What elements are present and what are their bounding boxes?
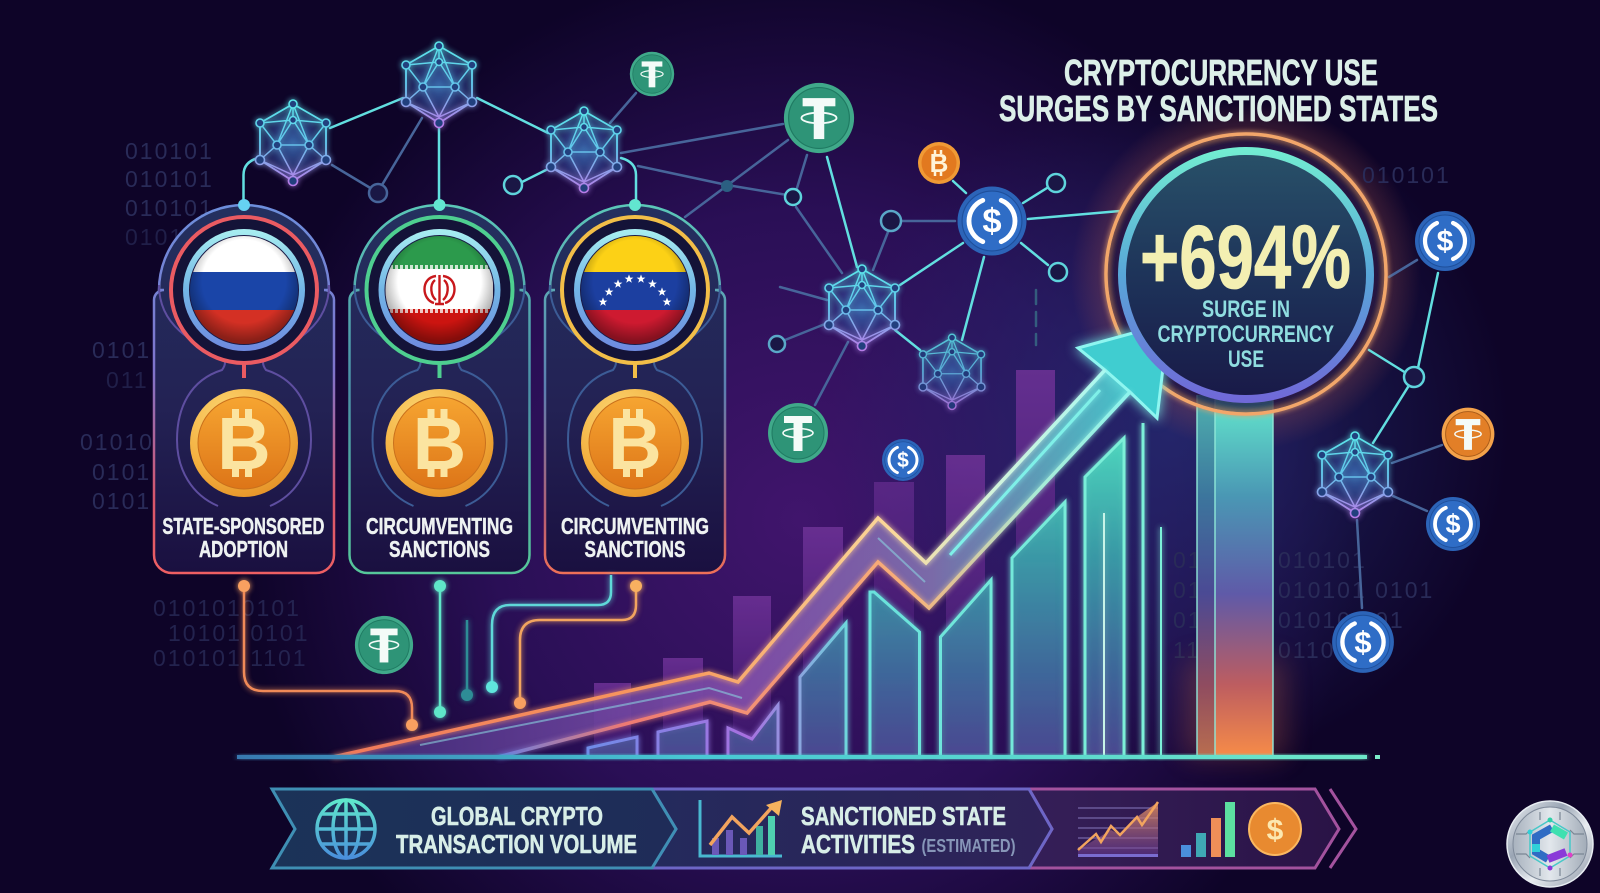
title (999, 52, 1438, 129)
legend text: global crypto transaction volume: TRANSACTION VOLUME (396, 829, 637, 859)
bitcoin coin (581, 389, 689, 497)
icon: tether token centre (768, 403, 828, 463)
icon: dollar coin (1249, 803, 1301, 855)
stat callout: +694% (1122, 151, 1370, 399)
stat outer orange ring (1106, 134, 1386, 414)
icon: dollar coin: $ (1267, 814, 1284, 847)
icon: tether token orange right (1442, 408, 1494, 460)
binary background text: 0101 (125, 224, 184, 250)
label: circumventing sanctions Iran: CIRCUMVENTING (366, 513, 513, 539)
icon: tether token large top (784, 83, 854, 153)
binary background text: 0101 (92, 459, 151, 485)
icon: blockchain node Iran branch (402, 42, 476, 128)
stat description: SURGE IN (1202, 296, 1290, 323)
label: state-sponsored adoption: ADOPTION (199, 536, 288, 562)
rising bars chart (588, 423, 1161, 757)
binary background text (80, 138, 1451, 671)
icon: line and bar chart (700, 800, 782, 856)
small network nodes (369, 174, 1424, 387)
label: circumventing sanctions Venezuela: CIRCUMVENTING (561, 513, 709, 539)
icon: blockchain node Venezuela branch (546, 107, 622, 192)
title: CRYPTOCURRENCY USE (1064, 52, 1378, 93)
icon: usdc token right: $ (1445, 509, 1461, 539)
binary background text: 10101 0101 (168, 620, 310, 646)
binary background text: 010101 (1278, 547, 1367, 573)
binary background text: 010101 0101 (1278, 577, 1434, 603)
stat description: USE (1228, 346, 1264, 373)
chart baseline (237, 755, 1380, 759)
label: state-sponsored adoption (162, 513, 324, 562)
Russia flag (171, 217, 317, 378)
icon: usdc token upper right: $ (1437, 225, 1454, 258)
legend text: global crypto transaction volume: GLOBAL CRYPTO (431, 801, 603, 831)
icon: area chart (1078, 802, 1158, 857)
label: circumventing sanctions Venezuela: SANCTIONS (584, 536, 686, 562)
label: circumventing sanctions Venezuela (561, 513, 709, 562)
stat description: CRYPTOCURRENCY (1158, 321, 1334, 348)
icon: usdc token hub (958, 186, 1026, 256)
panel: Venezuela (545, 199, 725, 573)
glowing column under stat (1185, 395, 1285, 757)
binary background text: 011 (106, 367, 149, 393)
icon: bitcoin token orange (918, 142, 960, 184)
legend text: sanctioned state activities (801, 801, 1016, 859)
binary background text: 0101 (92, 488, 151, 514)
panel: Iran (350, 199, 530, 573)
icon: blockchain node right (1318, 432, 1392, 518)
binary background text: 0101010101 (153, 595, 301, 621)
network connection lines (244, 93, 1442, 608)
arrow head (1078, 328, 1172, 418)
legend text: sanctioned state activities: SANCTIONED STATE (801, 801, 1006, 831)
bitcoin coin: B (413, 402, 466, 485)
legend text: global crypto transaction volume (396, 801, 637, 859)
bitcoin coin (386, 389, 494, 497)
icon: usdc token upper right (1415, 211, 1475, 271)
binary background text: 01 (1173, 577, 1203, 603)
stat description (1158, 296, 1334, 373)
icon: usdc token centre small: $ (897, 449, 909, 472)
big number: +694% (1140, 208, 1351, 308)
legend banner (272, 789, 1356, 868)
legend text: sanctioned state activities: ACTIVITIES (801, 829, 915, 859)
binary background text: 010101 (125, 166, 214, 192)
binary background text: 11 (1173, 637, 1201, 663)
icon: usdc token lower right: $ (1354, 624, 1372, 659)
icon: mini bars (1181, 802, 1235, 857)
icon: usdc token centre small (882, 439, 924, 481)
icon: usdc token hub: $ (982, 202, 1002, 240)
binary background text: 0110 01 (1278, 637, 1373, 663)
Venezuela flag (562, 217, 708, 378)
icon: globe (317, 800, 375, 858)
icon: usdc token lower right (1332, 611, 1394, 673)
icon: usdc token right (1426, 497, 1480, 551)
background purple bar chart (594, 370, 1055, 757)
watermark logo (1507, 801, 1593, 887)
icon: blockchain node centre (824, 265, 900, 350)
binary background text: 0101 (92, 337, 151, 363)
label: circumventing sanctions Iran: SANCTIONS (389, 536, 490, 562)
label: circumventing sanctions Iran (366, 513, 513, 562)
binary background text: 010101 (1362, 162, 1451, 188)
panel: Russia (154, 199, 334, 573)
circuit connectors from panels to chart (238, 575, 642, 731)
bitcoin coin: B (608, 402, 662, 485)
icon: bitcoin token orange: B (930, 148, 948, 178)
bitcoin coin (190, 389, 298, 497)
binary background text: 01 (1173, 547, 1203, 573)
binary background text: 01 (1173, 607, 1203, 633)
Iran flag (366, 217, 512, 378)
icon: blockchain node lower centre (919, 334, 985, 409)
binary background text: 01010 101 (1278, 607, 1405, 633)
growth arrow (333, 328, 1172, 757)
binary background text: 01010 (80, 429, 154, 455)
title: SURGES BY SANCTIONED STATES (999, 88, 1438, 129)
legend text: sanctioned state activities: (ESTIMATED) (922, 836, 1016, 856)
icon: blockchain node Russia branch (256, 100, 330, 186)
binary background text: 010101 (125, 195, 214, 221)
icon: tether token small top (630, 52, 674, 96)
label: state-sponsored adoption: STATE-SPONSORED (162, 513, 324, 539)
icon: tether token lower left (355, 616, 413, 674)
bitcoin coin: B (217, 402, 271, 485)
binary background text: 010101 (125, 138, 214, 164)
binary background text: 010101 1101 (153, 645, 308, 671)
